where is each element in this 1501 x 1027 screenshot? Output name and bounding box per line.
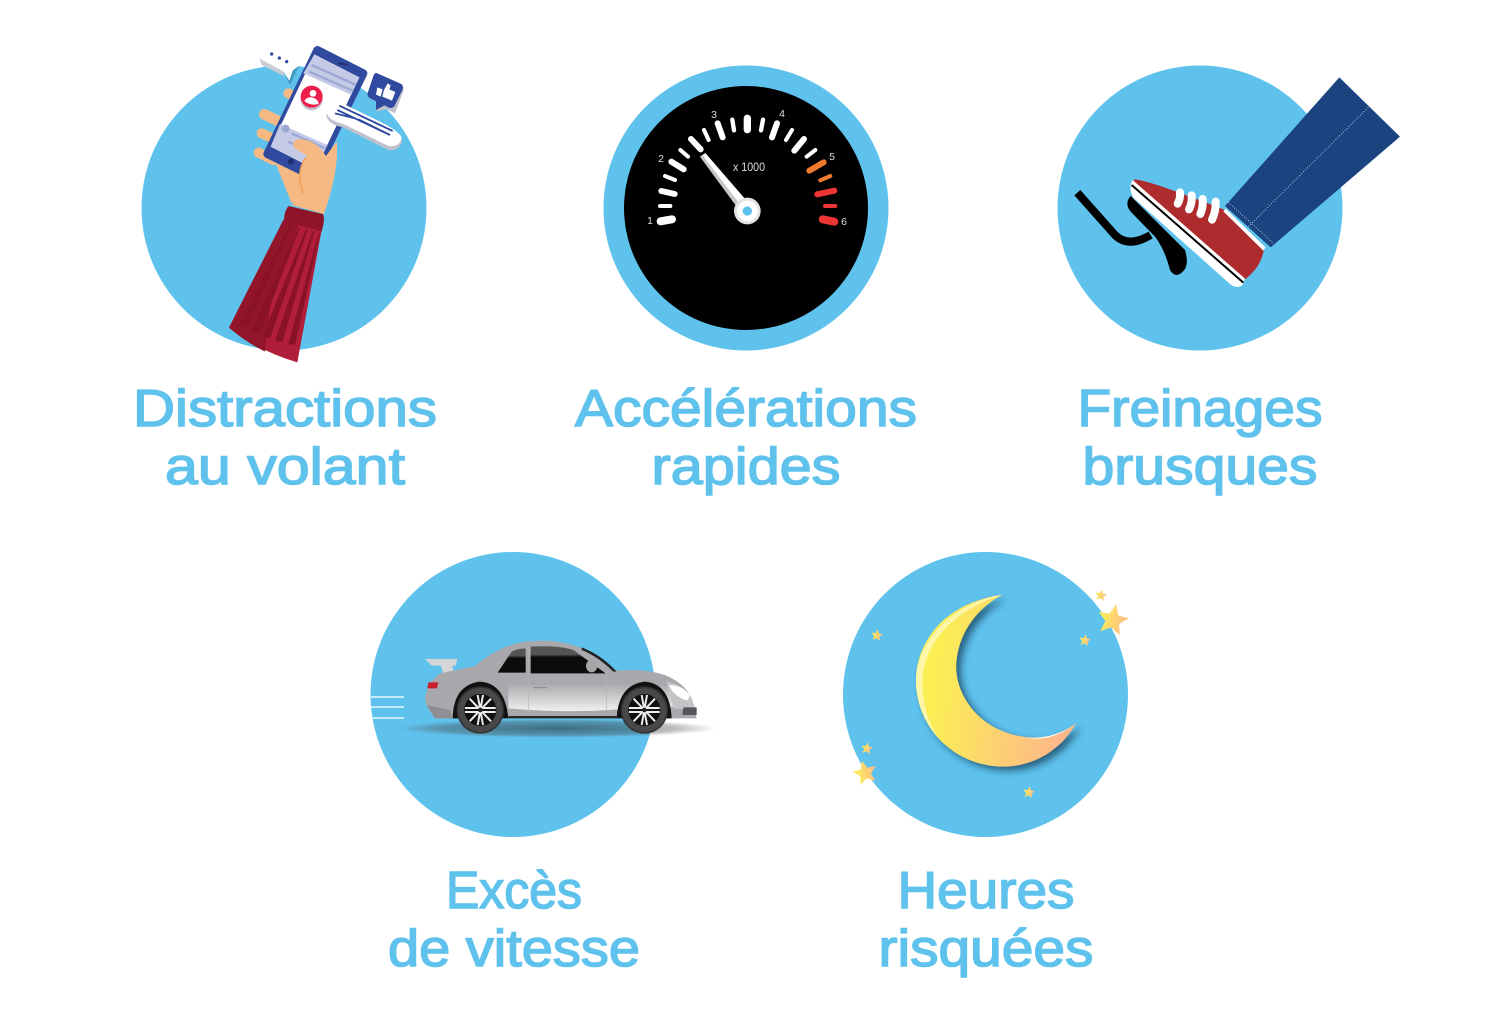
icon: sports car <box>397 641 717 738</box>
icon: hand holding phone <box>229 50 404 362</box>
gauge needle <box>700 153 761 224</box>
car windows <box>498 648 526 673</box>
circle: distractions background <box>142 66 426 350</box>
gauge numbers <box>647 108 847 228</box>
circle: freinages background <box>1058 66 1342 350</box>
gauge ticks <box>660 118 835 222</box>
heading: Heures risquées: risquées <box>878 920 1094 978</box>
heading: Excès de vitesse: Excès <box>446 862 582 920</box>
car wheels <box>457 686 504 734</box>
icon: chat bubble with dots <box>259 51 300 85</box>
heading: Distractions au volant: Distractions <box>133 380 437 438</box>
gauge dial <box>624 86 868 330</box>
icon: pedal <box>1077 193 1151 242</box>
icon: hand back <box>259 93 295 160</box>
circle: accélérations background <box>604 66 888 350</box>
icon: stars <box>850 588 1131 798</box>
car body <box>425 641 697 718</box>
heading: Distractions au volant: au volant <box>165 438 406 496</box>
panel: accélérations rapides <box>575 66 917 496</box>
circle: heures background <box>843 552 1128 837</box>
heading: Accélérations rapides: rapides <box>652 438 840 496</box>
icon: foot on brake pedal <box>1077 77 1400 287</box>
heading: Excès de vitesse: de vitesse <box>388 920 640 978</box>
icon: thumb and palm <box>292 139 337 214</box>
heading: Freinages brusques: brusques <box>1082 438 1318 496</box>
panel: heures risquées <box>843 552 1131 978</box>
icon: speed lines <box>371 697 404 718</box>
icon: sleeve <box>229 206 324 362</box>
panel: distractions au volant <box>133 50 437 496</box>
panel: freinages brusques <box>1058 66 1400 496</box>
gauge numbers: 3 <box>711 109 717 121</box>
gauge numbers: 4 <box>779 108 785 120</box>
gauge numbers: 5 <box>829 151 835 163</box>
gauge numbers: 2 <box>658 153 664 165</box>
gauge numbers: 6 <box>841 216 847 228</box>
heading: Heures risquées: Heures <box>898 862 1074 920</box>
gauge numbers: x 1000 <box>733 162 765 174</box>
icon: thumbs-up bubble <box>367 73 404 113</box>
heading: Freinages brusques: Freinages <box>1078 380 1322 438</box>
icon: crescent moon <box>916 595 1081 771</box>
circle: excès background <box>370 552 656 837</box>
icon: message bubble with lines <box>326 101 402 150</box>
gauge numbers: 1 <box>647 215 653 227</box>
icon: red shoe <box>1130 179 1266 287</box>
icon: tachometer <box>624 86 868 330</box>
icon: trouser leg <box>1225 77 1400 247</box>
panel: excès de vitesse <box>370 552 717 978</box>
car spoiler <box>425 659 457 675</box>
car details <box>427 682 438 688</box>
heading: Accélérations rapides: Accélérations <box>575 380 917 438</box>
icon: phone <box>267 50 363 177</box>
